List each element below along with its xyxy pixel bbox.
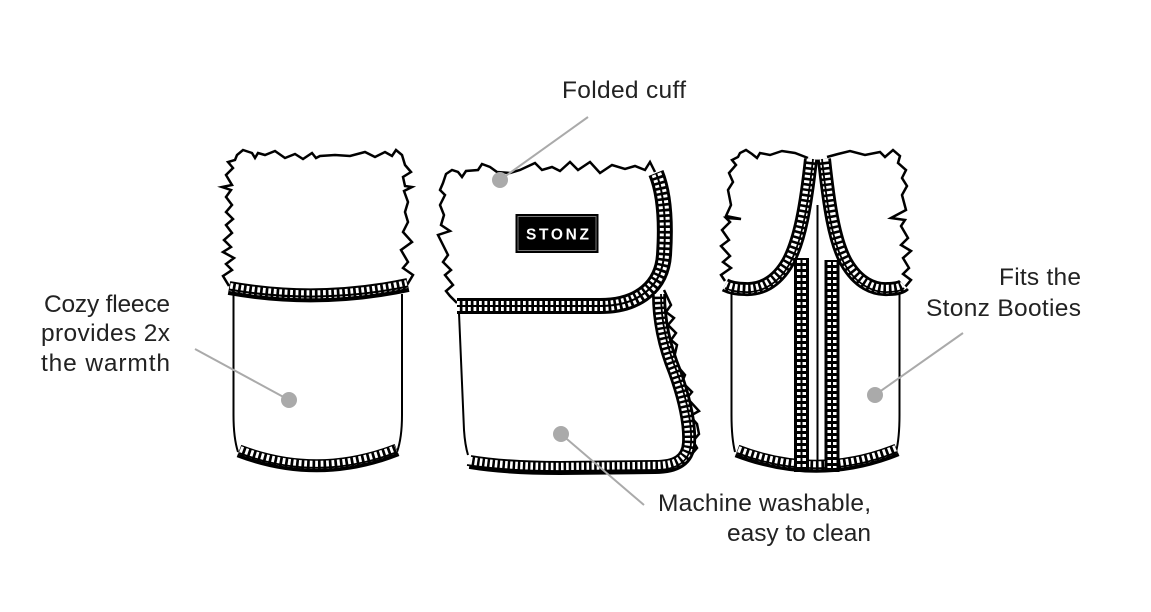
callout: cozy fleece	[41, 291, 297, 408]
front view fur cuff outline	[222, 150, 413, 286]
callout: machine washable: easy to clean	[727, 520, 871, 547]
callout: machine washable: Machine washable,	[658, 490, 871, 517]
back view left fur outline	[721, 150, 808, 281]
brand label: STONZ	[516, 214, 598, 253]
side view cuff band	[457, 173, 665, 306]
front view bottom band	[239, 449, 397, 468]
callout: fits the booties	[867, 264, 1081, 403]
back view right cuff band	[822, 159, 904, 292]
callout: fits the booties: Fits the	[999, 264, 1081, 291]
back view leg outline	[732, 292, 900, 452]
side view outer fur edge	[664, 290, 699, 455]
boot: side view	[438, 162, 699, 471]
back view left cuff band	[725, 159, 813, 292]
callout: folded cuff: Folded cuff	[562, 77, 686, 104]
back view right fur outline	[827, 150, 911, 287]
front view cuff band	[229, 284, 408, 297]
side view heel and bottom band	[467, 294, 691, 471]
callout: cozy fleece: provides 2x	[41, 320, 170, 347]
callout: cozy fleece: the warmth	[41, 350, 170, 377]
boot: back view	[721, 150, 911, 472]
callout: folded cuff	[492, 77, 686, 188]
side view fur cuff outline	[438, 162, 655, 303]
back view left vertical strap	[794, 258, 809, 472]
front view leg outline	[234, 294, 402, 452]
back view centre seam	[816, 205, 818, 466]
callout: fits the booties: Stonz Booties	[926, 295, 1081, 322]
callout: machine washable	[553, 426, 871, 547]
boot: front view	[222, 150, 413, 468]
side view leg outline	[459, 313, 468, 455]
back view right vertical strap	[824, 260, 840, 472]
callout: cozy fleece: Cozy fleece	[44, 291, 170, 318]
back view bottom band	[737, 449, 897, 468]
brand label: STONZ: STONZ	[526, 226, 590, 244]
